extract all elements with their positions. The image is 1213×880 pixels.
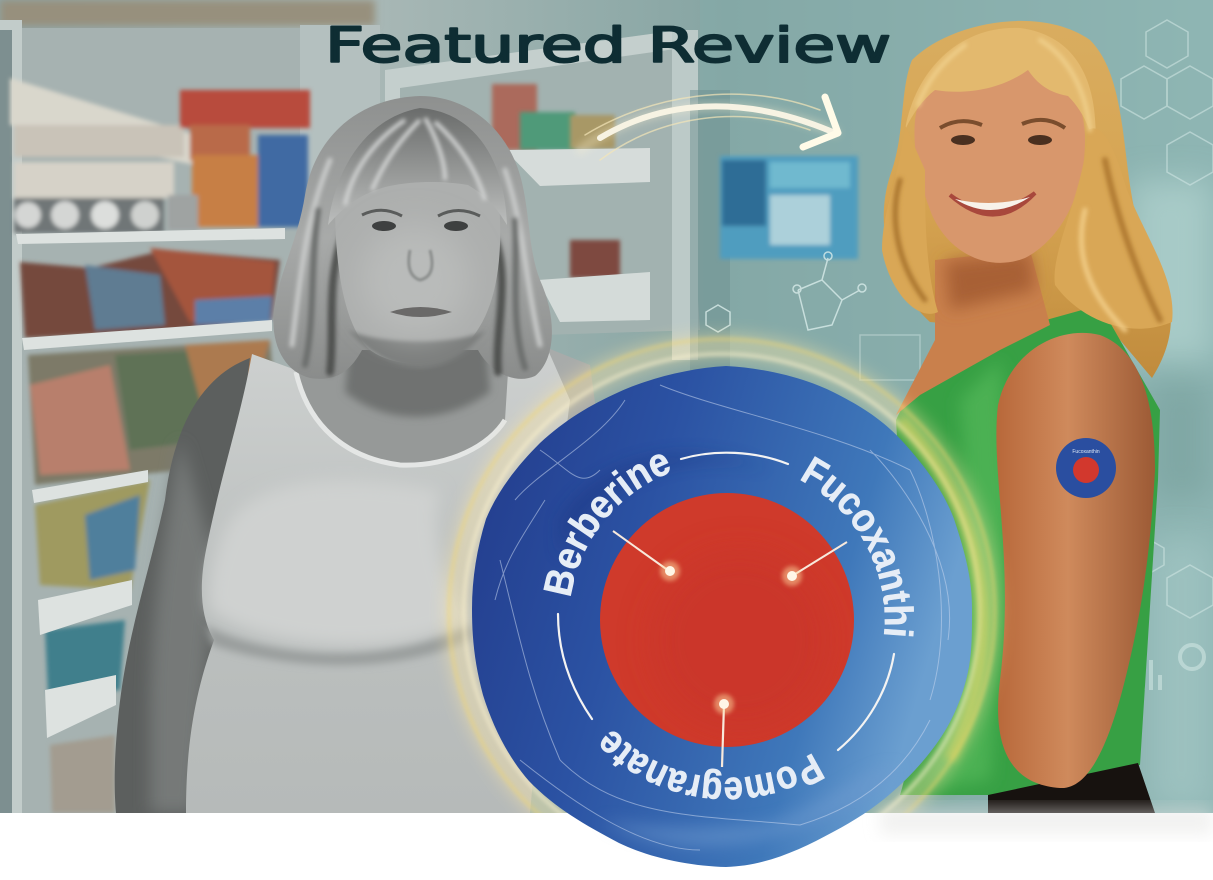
pointer: Pomegranate: [714, 694, 734, 767]
arc dividers: [558, 453, 894, 750]
hair back: [884, 21, 1171, 378]
pointer: Fucoxanthin: [782, 542, 847, 586]
mini patch on arm: [1056, 438, 1116, 498]
molecule graphic: [706, 252, 920, 380]
hair strands: [292, 160, 540, 372]
patch dark ring near centre: [560, 454, 770, 560]
face: [336, 182, 500, 360]
patch lower sheen: [600, 769, 900, 846]
red centre circle: [600, 493, 854, 747]
arrow: before to after: [580, 94, 838, 160]
label: Pomegranate: Pomegranate: [600, 732, 825, 800]
fringe: [328, 108, 507, 225]
right shoulder skin: [550, 349, 595, 420]
arm: [996, 333, 1155, 788]
fridge: left shelves: [0, 0, 380, 813]
green top: [896, 305, 1160, 795]
face: [914, 52, 1085, 263]
hexagon graphics: [1121, 20, 1213, 690]
patch disc: [472, 366, 972, 867]
hair side locks: [882, 125, 938, 314]
chest skin: [299, 362, 508, 462]
fine fibre lines: [495, 385, 950, 850]
title: Featured Review: [325, 18, 891, 74]
soft shadow under scene: [880, 808, 1213, 834]
right lab wall: [690, 0, 1213, 813]
facial features: [940, 120, 1065, 215]
right woman, after, colour: [882, 21, 1173, 813]
pointer: Berberine: [613, 531, 680, 581]
shelf edges: [16, 228, 285, 738]
label: Fucoxanthi: Fucoxanthi: [800, 456, 914, 636]
neck: [342, 350, 492, 420]
facial features: [362, 210, 480, 317]
mini patch on arm: Fucoxanthin: [1072, 449, 1100, 455]
red centre shading: [650, 550, 830, 730]
glow halo around patch: [449, 339, 995, 880]
fringe: [906, 28, 1096, 129]
wall screen: [720, 156, 858, 259]
label: Berberine: Berberine: [543, 454, 670, 596]
food items: [10, 78, 310, 813]
neck and chest: [896, 250, 1050, 415]
fridge: door shelves: [385, 30, 700, 360]
tank top: [186, 350, 570, 813]
ingredient patch: [472, 366, 972, 867]
left arm: [115, 358, 250, 813]
black shorts: [988, 763, 1155, 813]
hair mass: [273, 96, 552, 379]
hair strands: [895, 40, 1160, 330]
left woman, before, greyscale: [115, 96, 600, 813]
